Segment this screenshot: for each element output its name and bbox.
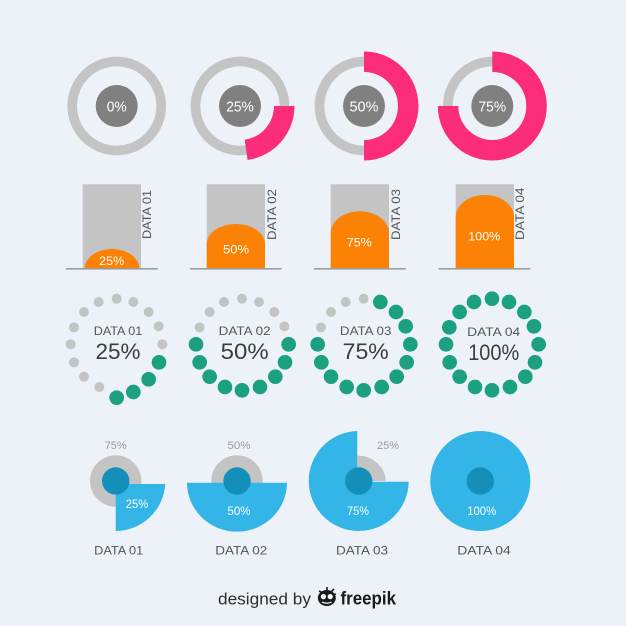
pie 50%: 50% bbox=[228, 506, 250, 518]
dot ring 100%: DATA 04 bbox=[467, 327, 521, 339]
dot ring 100% bbox=[439, 291, 546, 398]
donut 0% bbox=[72, 62, 161, 150]
bar 25%: 25% bbox=[99, 254, 125, 268]
pie 100%: DATA 04 bbox=[457, 544, 511, 558]
panel: blue pie row bbox=[90, 431, 530, 558]
dot ring 75%: DATA 03 bbox=[340, 326, 391, 338]
pie 75%: DATA 03 bbox=[336, 544, 388, 558]
pie 75%: 75% bbox=[347, 506, 369, 518]
pie 100% bbox=[430, 431, 530, 558]
bar 75% bbox=[314, 184, 406, 270]
dot ring 100%: 100% bbox=[468, 340, 519, 365]
pie 25% bbox=[90, 440, 165, 558]
dot ring 25%: 25% bbox=[96, 339, 140, 364]
pie 25%: DATA 01 bbox=[94, 544, 144, 558]
bar 75%: 75% bbox=[347, 235, 372, 249]
pie 25%: 75% bbox=[105, 440, 127, 452]
bar 50% bbox=[190, 184, 282, 270]
pie 75%: 25% bbox=[377, 440, 399, 452]
panel: dotted rings row bbox=[66, 291, 546, 405]
dot ring 50%: 50% bbox=[221, 339, 269, 364]
panel: donut progress row bbox=[72, 52, 547, 160]
donut 50%: 50% bbox=[350, 99, 379, 115]
pie 75% bbox=[309, 431, 409, 558]
bar 75%: DATA 03 bbox=[389, 189, 403, 240]
footer: freepik credit bbox=[218, 587, 397, 608]
dot ring 75%: 75% bbox=[343, 339, 389, 364]
dot ring 50%: DATA 02 bbox=[219, 326, 271, 338]
donut 25% bbox=[196, 62, 295, 160]
dot ring 75% bbox=[310, 294, 418, 398]
panel: orange dome bars row bbox=[66, 184, 530, 270]
pie 25%: 25% bbox=[126, 499, 148, 511]
pie 100%: 100% bbox=[467, 506, 496, 518]
donut 50% bbox=[320, 52, 418, 160]
pie 50% bbox=[187, 440, 287, 558]
bar 50%: DATA 02 bbox=[265, 189, 279, 240]
dot ring 50% bbox=[189, 294, 296, 398]
pie 50%: 50% bbox=[228, 440, 251, 452]
donut 75% bbox=[438, 52, 547, 160]
dot ring 25% bbox=[66, 294, 167, 405]
icon: freepik mascot bbox=[318, 587, 336, 606]
bar 25%: DATA 01 bbox=[140, 190, 154, 239]
pie 50%: DATA 02 bbox=[215, 544, 268, 558]
designed by text: designed by bbox=[218, 590, 312, 608]
freepik wordmark: freepik bbox=[340, 588, 397, 608]
bar 100%: DATA 04 bbox=[513, 187, 527, 240]
dot ring 25%: DATA 01 bbox=[94, 326, 142, 338]
bar 100%: 100% bbox=[468, 229, 501, 243]
bar 100% bbox=[439, 184, 530, 270]
bar 25% bbox=[66, 184, 158, 270]
donut 0%: 0% bbox=[107, 99, 127, 115]
donut 25%: 25% bbox=[226, 99, 254, 115]
donut 75%: 75% bbox=[479, 99, 506, 115]
bar 50%: 50% bbox=[223, 242, 249, 256]
